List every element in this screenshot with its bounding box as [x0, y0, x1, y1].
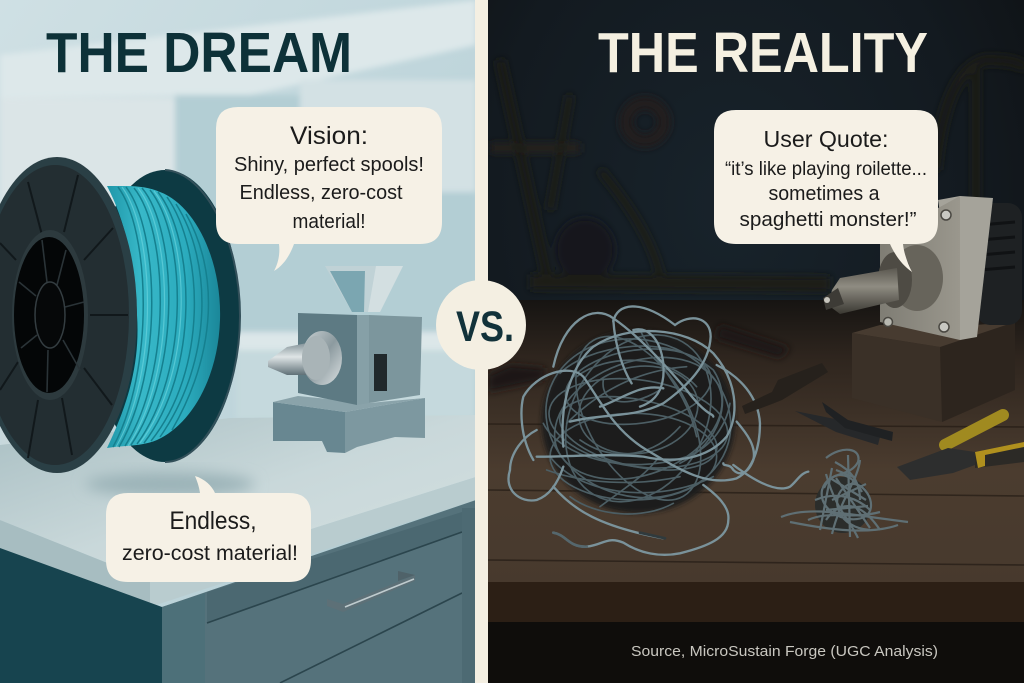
source note: Source, MicroSustain Forge (UGC Analysis) [631, 643, 938, 660]
callout: user quote: User Quote: [764, 126, 888, 152]
callout: endless material: zero-cost material! [122, 541, 298, 565]
icon: filament spool [0, 157, 240, 473]
heading: the dream: THE DREAM [46, 21, 352, 85]
callout: vision: Endless, zero-cost [240, 181, 403, 204]
callout: vision: material! [292, 210, 366, 233]
callout: user quote: “it’s like playing roilette... [725, 159, 927, 180]
cabinet [0, 548, 162, 683]
panel: the dream [0, 0, 476, 683]
icon: desktop extruder [268, 266, 425, 453]
callout: vision: Shiny, perfect spools! [234, 153, 424, 176]
callout: vision: Vision: [290, 122, 368, 150]
icon: small filament clump [781, 450, 908, 538]
heading: the reality: THE REALITY [598, 21, 928, 85]
callout: vision [216, 107, 442, 271]
icon: worn extruder [823, 196, 1022, 422]
counter top [0, 415, 476, 580]
table [488, 300, 1024, 585]
divider [475, 0, 488, 683]
callout: user quote [714, 110, 938, 272]
callout: endless material [106, 476, 311, 582]
callout: user quote: sometimes a [768, 183, 880, 205]
drawer handle [327, 571, 415, 612]
icon: tangled filament [508, 306, 808, 555]
panel: the reality [488, 0, 1024, 683]
badge: vs.: VS. [456, 303, 514, 351]
callout: user quote: spaghetti monster!” [740, 208, 917, 231]
badge: vs. [436, 280, 526, 370]
icon: hand tools [742, 363, 1024, 480]
callout: endless material: Endless, [170, 507, 256, 535]
